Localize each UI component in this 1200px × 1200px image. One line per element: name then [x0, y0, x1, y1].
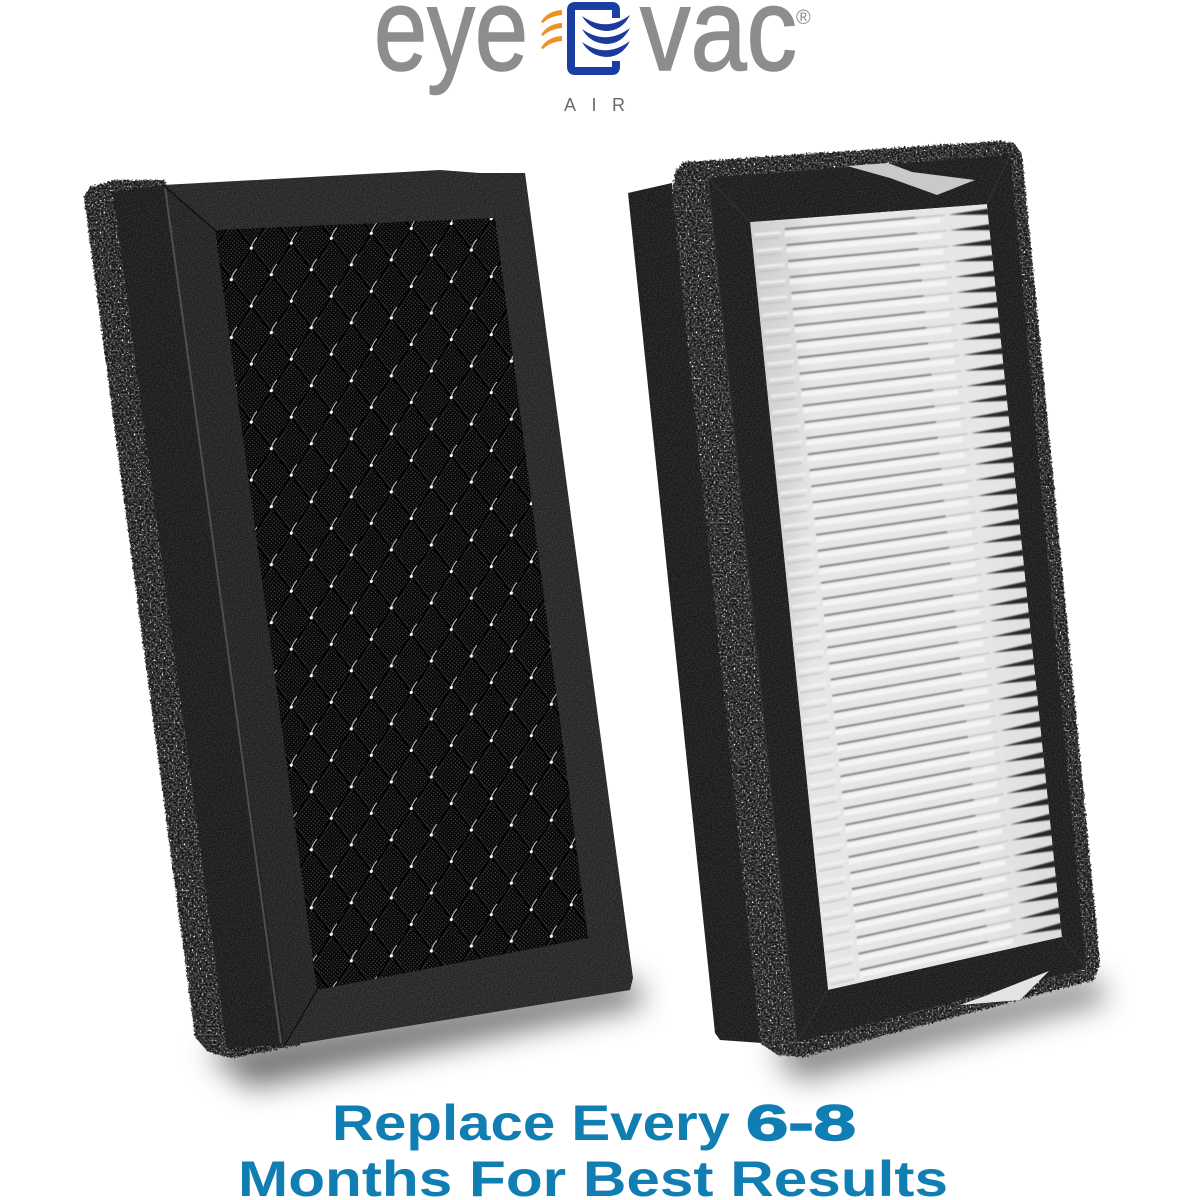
logo icon: blue filter: [571, 6, 630, 71]
left filter side panel: [113, 185, 285, 1048]
left filter inner frame side: [163, 185, 317, 1045]
left filter crease: [165, 187, 281, 1043]
shadow: right filter: [770, 978, 1108, 1080]
top pull tab: [847, 163, 975, 195]
right filter pleated HEPA window: [750, 204, 1068, 1003]
panel: right HEPA filter: [628, 141, 1108, 1080]
highlighted number range: 6-8: [746, 1095, 856, 1151]
caption: replace every 6-8 months: [238, 1095, 948, 1200]
logo icon: orange air waves: [541, 10, 562, 49]
caption line 1: [332, 1095, 856, 1151]
panel: left carbon filter: [84, 170, 645, 1088]
caption line 1: Replace Every: [332, 1095, 730, 1151]
right filter rear panel: [628, 183, 762, 1043]
bottom pull tab: [937, 971, 1049, 1013]
left filter carbon mesh window: [215, 218, 588, 990]
left filter foam backing: [84, 180, 300, 1058]
left filter mitre lines: [163, 185, 317, 1045]
logo subtitle: AIR: AIR: [564, 95, 625, 115]
right filter mitre and crease lines: [708, 155, 1086, 1042]
right filter foam: [672, 141, 1100, 1057]
left filter frame: [163, 170, 633, 1046]
registered mark: ®: [796, 7, 811, 29]
shadow: left filter: [205, 978, 645, 1088]
logo: eyevac air: [374, 0, 811, 115]
right filter frame: [708, 155, 1086, 1042]
